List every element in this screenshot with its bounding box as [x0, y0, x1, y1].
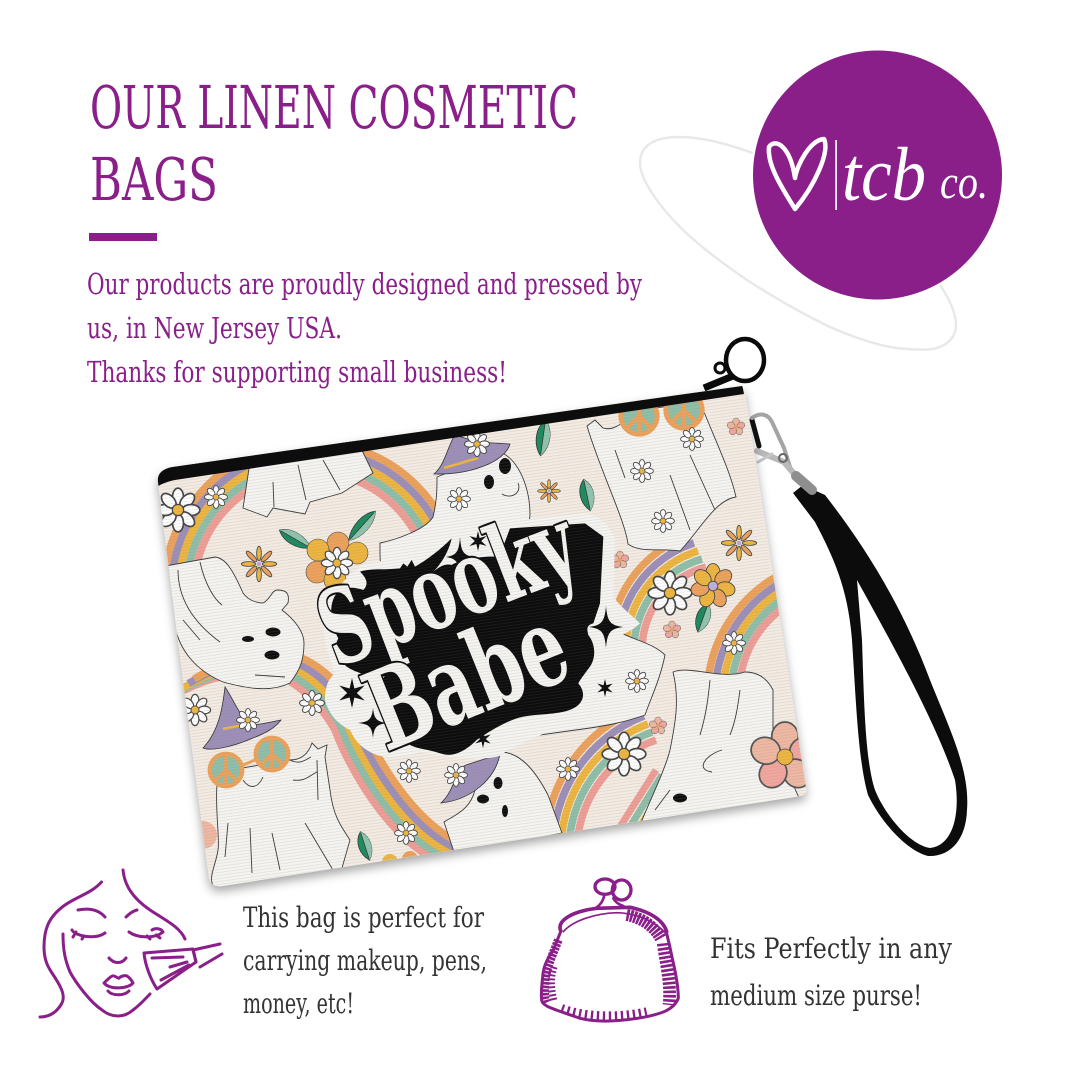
ghost bottom right — [640, 670, 800, 825]
linen texture — [158, 387, 806, 886]
ghosts — [160, 392, 800, 892]
bottom right rainbow fragment — [618, 768, 661, 824]
lettering: Spooky — [301, 481, 595, 691]
top rainbow — [166, 442, 436, 572]
logo wordmark — [842, 133, 988, 217]
lettering: Babe — [347, 580, 586, 776]
bottom center rainbow — [542, 716, 658, 836]
metal clasp — [752, 415, 812, 490]
feature text: purse: medium size purse! — [710, 979, 922, 1012]
orbit outline — [640, 137, 956, 350]
sticker background — [323, 513, 640, 759]
feature text: makeup: carrying makeup, pens, — [243, 944, 487, 977]
lettering — [316, 520, 572, 753]
middle right rainbow — [616, 539, 706, 643]
title — [90, 73, 578, 214]
rainbow stripes — [166, 442, 780, 855]
title: BAGS — [90, 145, 218, 214]
far right rainbow — [706, 574, 780, 674]
spooky babe graphic — [316, 520, 623, 755]
logo wordmark: tcb — [842, 133, 926, 217]
intro text: Our products are proudly designed and pressed by — [87, 267, 642, 301]
lower left rainbow — [184, 655, 478, 855]
feature text: makeup: This bag is perfect for — [243, 901, 484, 934]
wristlet strap — [752, 415, 967, 856]
logo wordmark: co. — [940, 156, 988, 209]
ghost bottom center — [444, 752, 562, 855]
feature text: makeup: money, etc! — [243, 987, 354, 1020]
ghost with witch hat top — [380, 454, 530, 562]
stars — [339, 531, 623, 748]
icon: coin purse — [541, 879, 678, 1021]
logo heart — [769, 139, 825, 209]
intro text: Thanks for supporting small business! — [87, 355, 507, 389]
ghost top left — [243, 440, 373, 517]
title rule — [89, 233, 157, 241]
flowers and leaves — [156, 418, 822, 870]
ghost with sunglasses top right — [587, 402, 736, 551]
feature text: purse: Fits Perfectly in any — [710, 932, 952, 965]
ghost with hat and glasses bottom left — [211, 743, 350, 892]
feature text: purse — [710, 932, 952, 1012]
black retro shadow and bat — [331, 523, 603, 755]
feature text: makeup — [243, 901, 487, 1020]
product: cosmetic bag — [140, 370, 830, 900]
zipper — [155, 384, 744, 488]
title: OUR LINEN COSMETIC — [90, 73, 578, 142]
zipper ring — [704, 339, 764, 388]
ghost behind sticker — [540, 634, 666, 736]
icon: face with makeup brush — [40, 870, 222, 1017]
intro text: us, in New Jersey USA. — [87, 311, 342, 345]
ghost lying left — [160, 557, 304, 689]
logo badge — [753, 50, 1002, 300]
intro text — [87, 267, 642, 389]
